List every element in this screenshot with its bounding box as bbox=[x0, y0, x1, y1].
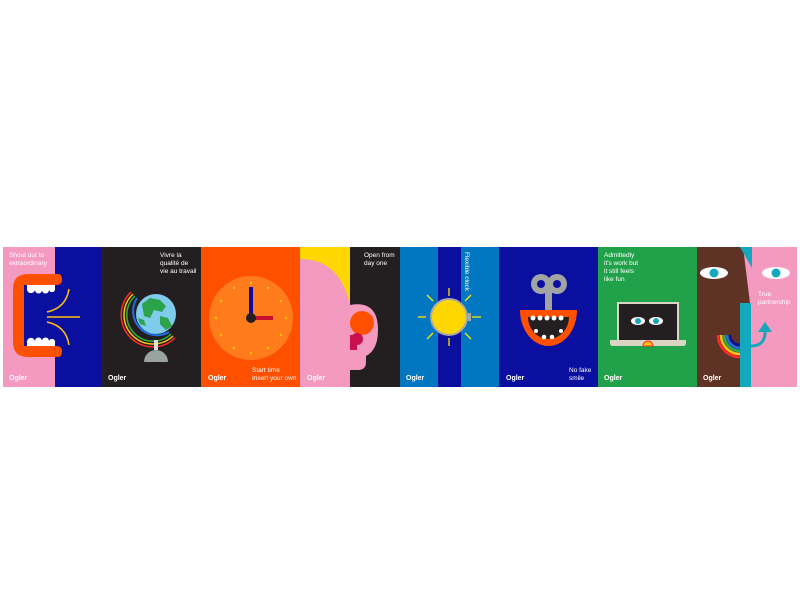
icon: rainbow bbox=[718, 335, 740, 357]
text: no fake smile: No fake bbox=[569, 367, 592, 374]
panel: clock bbox=[201, 247, 300, 387]
logo: Ogler bbox=[108, 375, 127, 382]
icon: mouth bbox=[13, 274, 62, 357]
text: admittedly: Admittedly bbox=[604, 252, 635, 259]
panel: laptop: it still feels bbox=[604, 268, 635, 275]
poster strip bbox=[3, 247, 797, 387]
logo: Ogler bbox=[307, 375, 326, 382]
text: flexible clock: Flexible clock bbox=[463, 252, 470, 292]
panel: laptop: it's work but bbox=[604, 260, 638, 267]
icon: laptop bbox=[610, 302, 686, 346]
logo: Ogler bbox=[703, 375, 722, 382]
text: true partnership: True bbox=[758, 291, 772, 298]
logo: Ogler bbox=[9, 375, 28, 382]
icon: globe bbox=[121, 292, 176, 362]
text: shout out: Shout out to bbox=[9, 252, 44, 259]
logo: Ogler bbox=[208, 375, 227, 382]
icon: eyes bbox=[700, 267, 790, 279]
panel: clock: Insert your own bbox=[252, 375, 297, 382]
panel: shout out bbox=[3, 247, 102, 387]
panel: partnership: partnership bbox=[758, 299, 791, 306]
panel: sun clock bbox=[400, 247, 499, 387]
logo: Ogler bbox=[406, 375, 425, 382]
panel: laptop bbox=[598, 247, 697, 387]
icon: ear bbox=[350, 304, 378, 370]
panel: globe: qualité de bbox=[160, 260, 189, 267]
panel: smile bbox=[499, 247, 598, 387]
icon: wind-up smile bbox=[520, 274, 577, 346]
panel: globe bbox=[102, 247, 201, 387]
text: open from day one: Open from bbox=[364, 252, 395, 259]
panel: partnership bbox=[697, 247, 797, 387]
logo: Ogler bbox=[506, 375, 525, 382]
panel: ear bbox=[300, 247, 400, 387]
panel: shout out: extraordinary bbox=[9, 260, 48, 267]
panel: globe: vie au travail bbox=[160, 268, 197, 275]
logo: Ogler bbox=[604, 375, 623, 382]
icon: clock bbox=[209, 276, 293, 360]
text: vivre: Vivre la bbox=[160, 252, 182, 259]
panel: laptop: like fun bbox=[604, 276, 625, 283]
icon: sound lines bbox=[47, 289, 80, 345]
panel: ear: day one bbox=[364, 260, 388, 267]
text: start time: Start time bbox=[252, 367, 280, 374]
icon: sun bbox=[418, 288, 481, 346]
panel: smile: smile bbox=[569, 375, 585, 382]
icon: arrow bbox=[751, 322, 772, 346]
